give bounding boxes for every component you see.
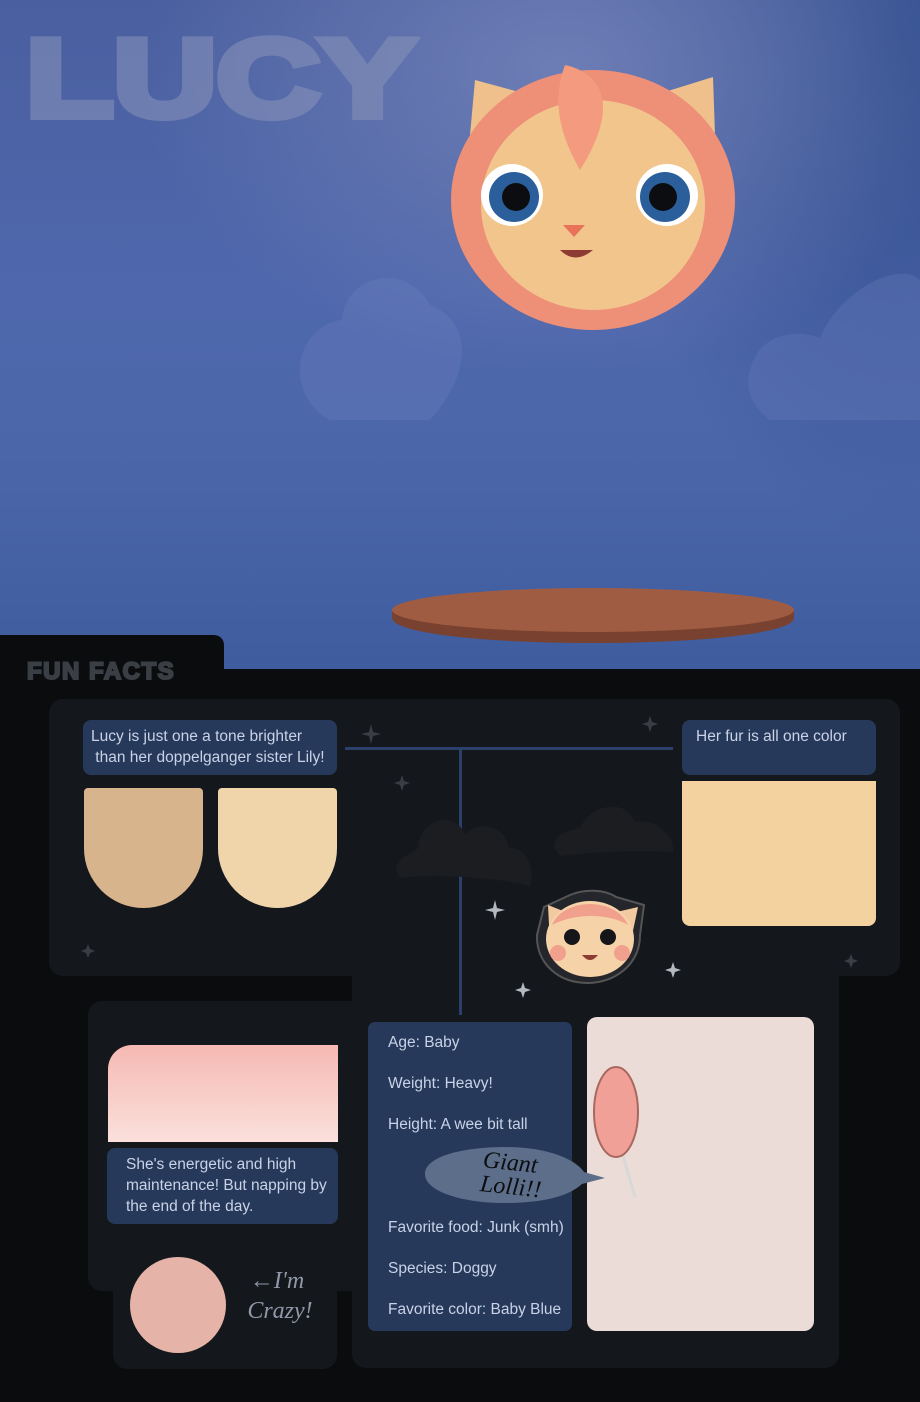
heading: FUN FACTS [27, 658, 175, 685]
icon: clouds [459, 826, 462, 877]
icon: face sticker [536, 890, 645, 984]
title: LUCY [26, 17, 415, 140]
handwritten note: Crazy! [247, 1298, 313, 1324]
height: Height: A wee bit tall [388, 1116, 528, 1133]
callout: giant lolli: Giant [482, 1147, 539, 1179]
panel: crazy portrait [113, 1235, 337, 1369]
connector lines [345, 747, 673, 1015]
handwritten note: ←I'm [250, 1268, 304, 1294]
caption: brighter tone: Lucy is just one a tone brighter [91, 728, 302, 745]
background clouds [300, 274, 920, 420]
favorite food: Favorite food: Junk (smh) [388, 1219, 564, 1236]
panel: stats [352, 960, 839, 1368]
caption: energetic: She's energetic and high maintenance! But napping by the end of the day. [126, 1156, 327, 1215]
caption: brighter tone: than her doppelganger sister Lily! [95, 749, 325, 766]
age: Age: Baby [388, 1034, 460, 1051]
icon: character head placeholder [451, 65, 735, 330]
image placeholder: lucy [218, 788, 337, 908]
image placeholder: lily [84, 788, 203, 908]
icon: sparkle stars [82, 716, 858, 998]
image placeholder: fur swatch [682, 781, 876, 926]
image placeholder: round portrait [130, 1257, 226, 1353]
handwritten note [247, 1268, 313, 1324]
weight: Weight: Heavy! [388, 1075, 493, 1092]
caption: brighter tone [83, 720, 337, 775]
favorite color: Favorite color: Baby Blue [388, 1301, 561, 1318]
callout: giant lolli [425, 1147, 605, 1203]
pedestal [392, 588, 794, 643]
tab: fun facts [0, 635, 224, 685]
panel: stats list [368, 1022, 572, 1331]
icon: lollipop [593, 1066, 639, 1198]
species: Species: Doggy [388, 1260, 497, 1277]
callout: giant lolli: Lolli!! [479, 1171, 543, 1203]
panel: top facts [49, 699, 900, 976]
image placeholder: lollipop card [587, 1017, 814, 1331]
image placeholder: pink clouds banner [108, 1045, 338, 1142]
caption: fur: Her fur is all one color [696, 728, 847, 745]
caption: fur [682, 720, 876, 775]
caption: energetic [107, 1148, 338, 1224]
panel: lower left [88, 1001, 388, 1291]
hero background [0, 0, 920, 669]
